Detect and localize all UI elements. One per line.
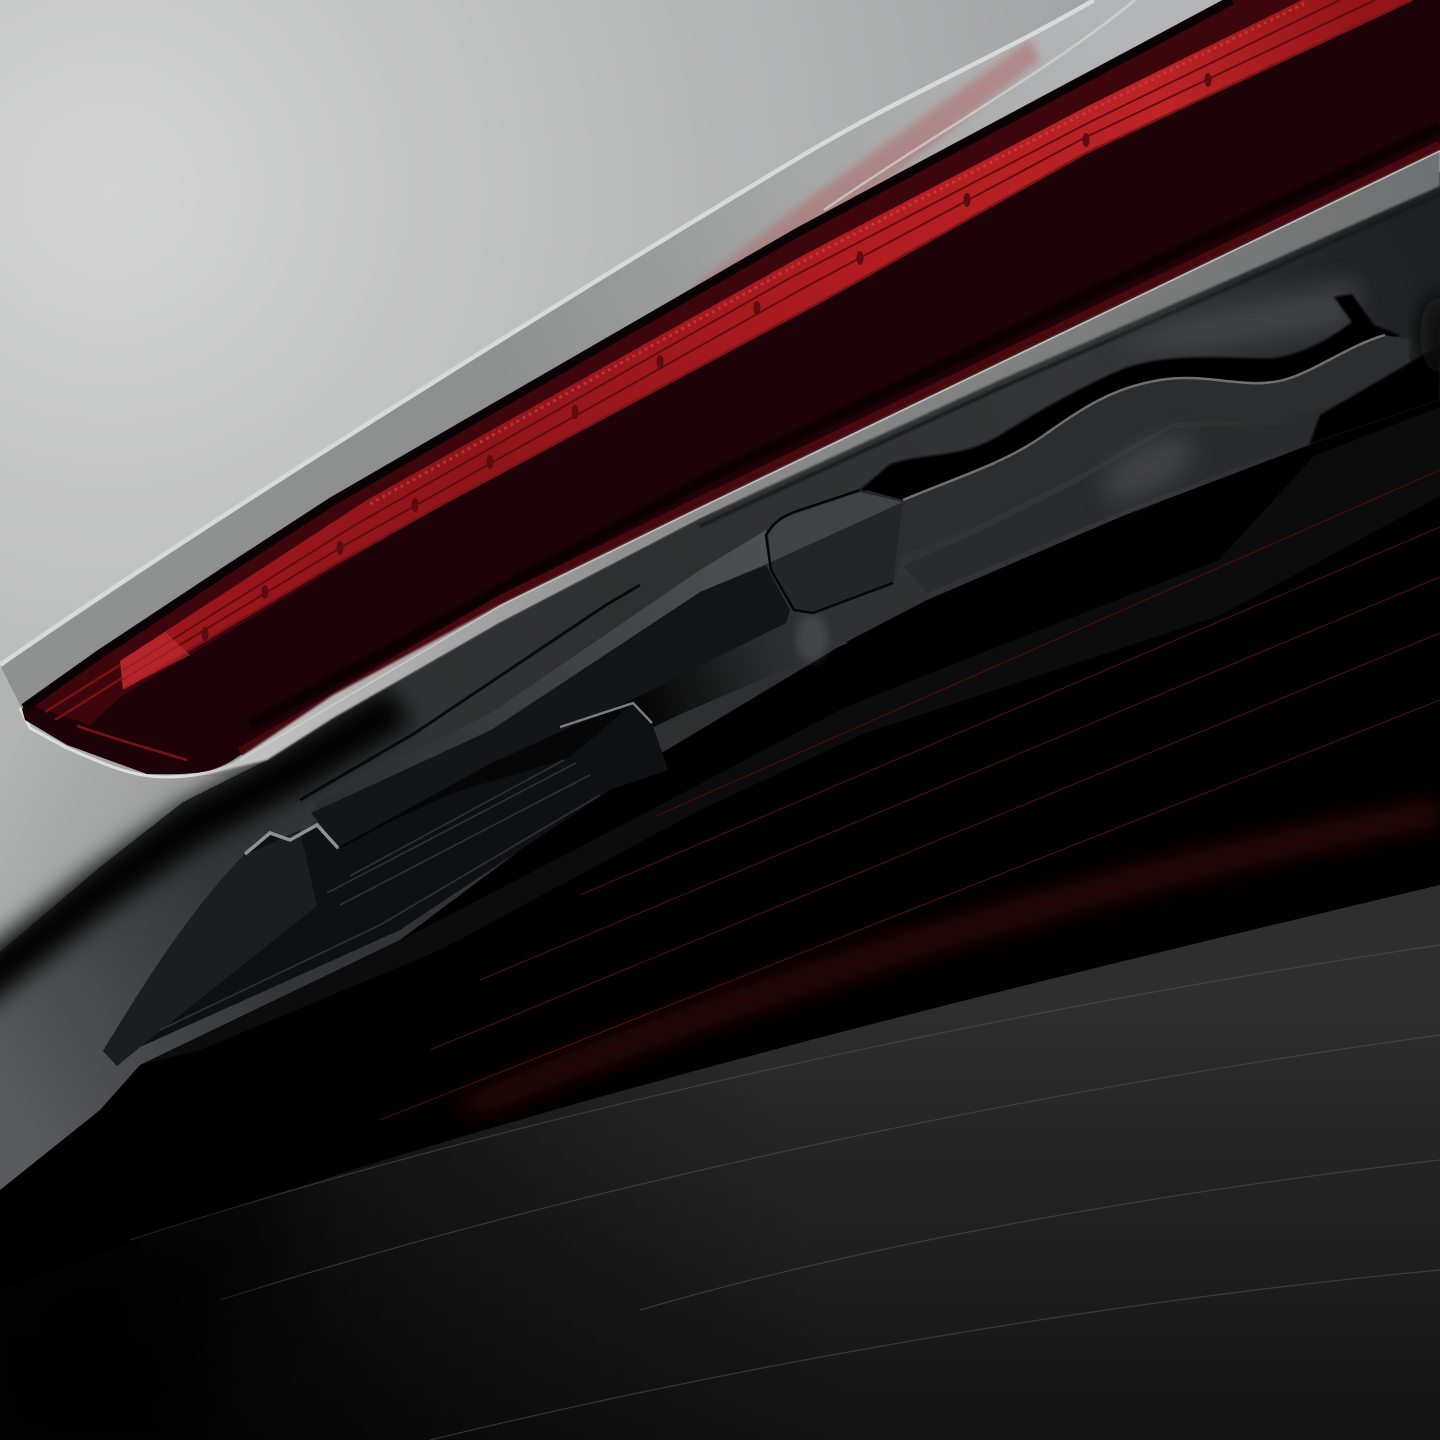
wiper arm: shoulder highlight [796,614,828,662]
wiper arm [300,294,1440,870]
highlight: faint second reflection line [824,0,1135,210]
lamp: red tip tail [45,665,187,760]
panel: dark car body lower section [0,885,1440,1440]
wiper arm: dark crease above bevel [300,585,640,800]
wiper arm: corner shadow [1420,295,1440,375]
highlight: strip top line [240,151,1440,760]
lamp: LED marks [202,73,1212,641]
lamp: lower maroon rim [240,145,1440,752]
wiper arm: rod highlight [903,335,1385,500]
lamp: bright red light strip [120,0,1412,689]
panel: silver band below crease [0,0,1440,980]
panel: silver sill under lamp [0,665,300,1000]
wiper arm: shaped rod shadow [860,294,1400,510]
wiper blade: body [103,703,668,1066]
wiper blade: ribs [160,760,600,1030]
shadow: crease under strip [700,194,1440,526]
reflection: tailgate soft highlight [1110,280,1360,350]
lamp: dark segment lines [122,0,1375,680]
wiper arm: lower rod highlight [1094,424,1202,512]
wiper arm: lit bevel [311,530,771,813]
reflection: red lamp glow on body [690,40,1040,290]
lamp: silver outline at tip [20,708,240,777]
wiper blade [103,703,668,1066]
wiper blade: left housing [103,830,317,1066]
lamp: maroon upper band [30,0,1320,725]
body: left shadow [0,1190,280,1440]
panel: dark tailgate trim [0,172,1440,1200]
reflection: window red glow [450,800,1440,1115]
wiper arm: shaped rod [820,335,1412,583]
reflection: window red lines [380,470,1440,1120]
lamp: housing [22,0,1440,774]
shadow: tailgate edge on left [0,705,400,1000]
lamp: lower dark band [250,127,1440,725]
panel: tail lamp [20,0,1440,777]
panel: dark lower trim [140,407,1440,1065]
wiper arm: hub outline [766,490,893,613]
wiper arm: pivot shadow [1309,345,1440,445]
body: contour lines [130,945,1440,1440]
wiper arm: shoulder [338,623,848,870]
wiper arm: pivot hub [766,490,903,613]
panel: silver trim strip [200,150,1440,776]
wiper blade: metal clip [245,825,338,854]
wiper arm: hub lit face [768,492,903,562]
lamp: black top edge [24,0,1232,708]
lamp: strip lower glow [123,0,1412,689]
wiper arm: dark face [311,565,790,847]
wiper blade: head bracket [560,703,652,727]
wiper arm: lower rod [903,425,1309,593]
panel: black rear window [0,400,1440,1290]
lamp: beaded top line [370,3,1305,504]
highlight: body crease line [0,0,1094,665]
lamp: lit end segment [120,632,190,689]
